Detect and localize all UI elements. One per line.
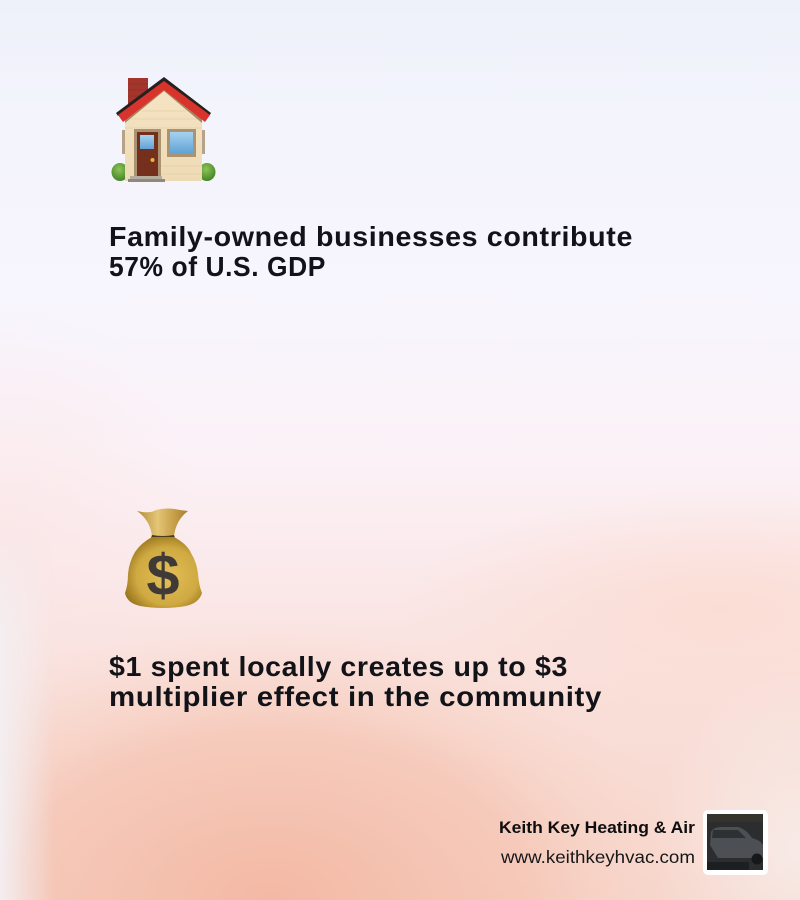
icon: house xyxy=(112,77,216,182)
footer: company name: Keith Key Heating & Air xyxy=(499,819,696,837)
heading: family-owned businesses xyxy=(109,221,633,282)
footer: company photo xyxy=(703,810,768,875)
heading: local multiplier xyxy=(109,651,602,712)
heading: family-owned businesses: 57% of U.S. GDP xyxy=(109,251,326,282)
icon: money bag xyxy=(125,508,202,608)
footer: website: www.keithkeyhvac.com xyxy=(500,847,695,867)
icon: money bag: $ xyxy=(146,543,180,608)
heading: local multiplier: $1 spent locally creates up to $3 xyxy=(109,651,568,682)
heading: family-owned businesses: Family-owned businesses contribute xyxy=(109,221,633,252)
heading: local multiplier: multiplier effect in the community xyxy=(109,681,602,712)
background gradient xyxy=(0,326,800,900)
